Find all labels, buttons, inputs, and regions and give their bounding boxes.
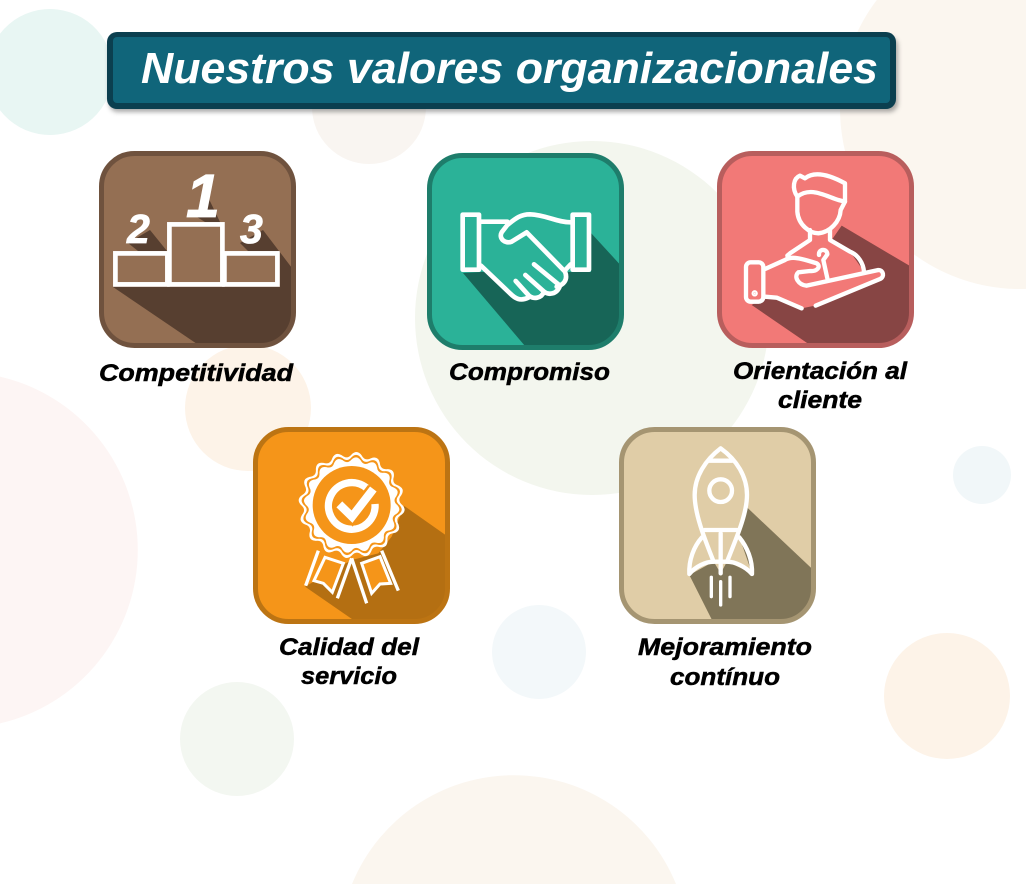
label: Mejoramiento contínuo (638, 634, 812, 691)
label: Orientación al cliente: Orientación al (733, 358, 908, 385)
label: Calidad del servicio: Calidad del (279, 634, 420, 661)
long shadow (689, 507, 819, 620)
icon: rocket (689, 448, 752, 605)
podium numbers: 1 (186, 162, 220, 230)
label: Mejoramiento contínuo: Mejoramiento (638, 634, 812, 661)
title banner (107, 32, 898, 112)
long shadow (305, 506, 452, 620)
long shadow (463, 233, 625, 346)
card: Calidad del servicio (256, 430, 452, 622)
card: Compromiso (430, 156, 625, 348)
label: Mejoramiento contínuo: contínuo (670, 664, 780, 691)
card: Competitividad (102, 154, 295, 346)
label: Orientación al cliente: cliente (778, 387, 862, 414)
icon: handshake (463, 214, 589, 299)
podium numbers (126, 162, 263, 252)
title text: Nuestros valores organizacionales (141, 44, 878, 93)
card: Mejoramiento contínuo (622, 430, 819, 622)
icon: award ribbon (299, 452, 405, 603)
label: Calidad del servicio (279, 634, 420, 690)
label: Calidad del servicio: servicio (301, 663, 397, 690)
icon: podium (115, 224, 277, 284)
label: Orientación al cliente (733, 358, 908, 414)
icon: person on hand (746, 174, 883, 308)
label: Competitividad: Competitividad (99, 360, 294, 387)
label: Compromiso: Compromiso (449, 359, 610, 386)
long shadow (752, 226, 915, 345)
card: Orientación al cliente (720, 154, 915, 346)
podium numbers: 3 (240, 206, 263, 252)
podium numbers: 2 (126, 206, 150, 252)
long shadow (113, 197, 295, 346)
